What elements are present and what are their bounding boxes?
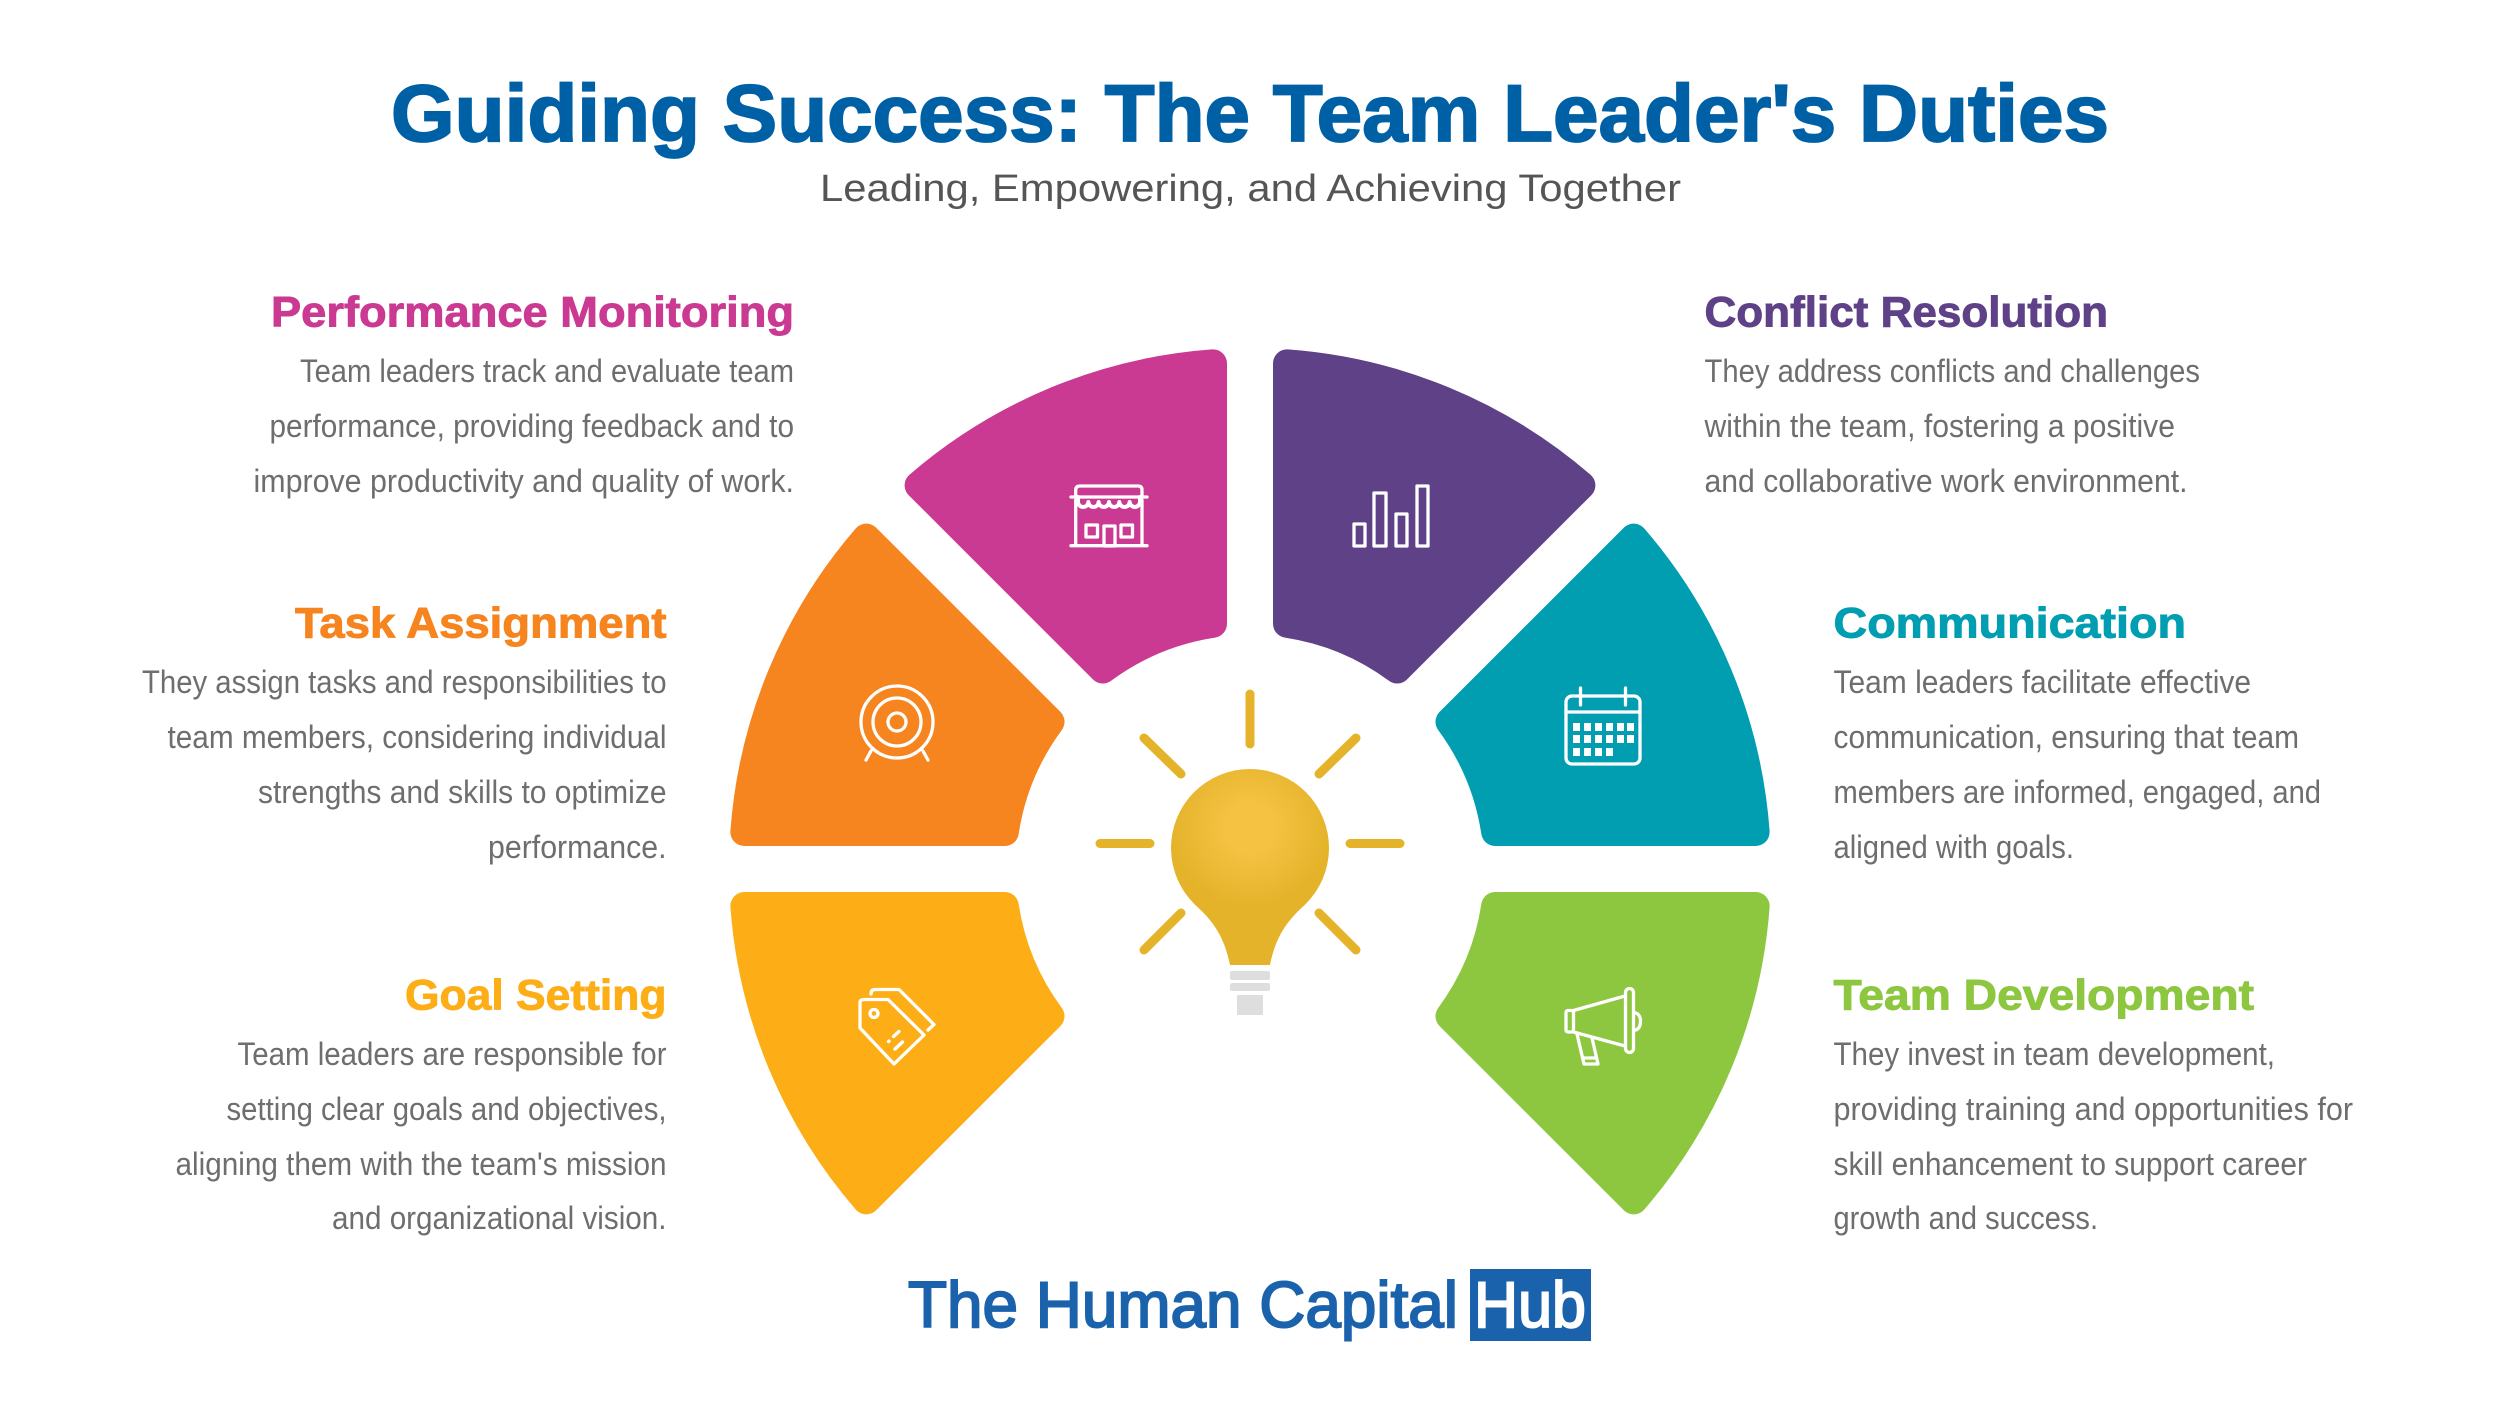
panel: team development (1834, 972, 2353, 1236)
description (1704, 353, 2200, 499)
description: strengths and skills to optimize (258, 774, 666, 810)
icon: bar chart (1354, 486, 1428, 546)
description: and collaborative work environment. (1704, 463, 2188, 499)
panel: conflict resolution (1704, 288, 2200, 499)
description: and organizational vision. (332, 1200, 666, 1236)
description: aligned with goals. (1834, 829, 2074, 865)
segment: team development (1450, 906, 1756, 1200)
panel: communication (1834, 600, 2321, 865)
description: They invest in team development, (1834, 1036, 2275, 1072)
heading: Task Assignment (295, 600, 666, 648)
icon: price tags (860, 990, 934, 1064)
icon: storefront (1071, 486, 1147, 546)
segment: task assignment (744, 538, 1050, 832)
bulb base (1230, 971, 1270, 1015)
heading: Conflict Resolution (1704, 288, 2108, 336)
description: They address conflicts and challenges (1704, 353, 2200, 389)
heading: Goal Setting (405, 972, 666, 1020)
description: setting clear goals and objectives, (226, 1091, 666, 1127)
description (176, 1036, 667, 1236)
description: team members, considering individual (168, 719, 666, 755)
heading: Team Development (1834, 972, 2254, 1020)
segment: communication (1450, 538, 1756, 832)
description: They assign tasks and responsibilities to (142, 664, 666, 700)
title: Guiding Success: The Team Leader's Duties (391, 69, 2109, 159)
description: performance, providing feedback and to (270, 408, 794, 444)
heading: Communication (1834, 600, 2186, 648)
icon: megaphone (1566, 988, 1640, 1064)
icon: target (861, 686, 933, 760)
bulb rays (1100, 694, 1400, 950)
description: performance. (488, 829, 666, 865)
description: communication, ensuring that team (1834, 719, 2299, 755)
description: skill enhancement to support career (1834, 1146, 2307, 1182)
segment: goal setting (744, 906, 1050, 1200)
description: Team leaders facilitate effective (1834, 664, 2251, 700)
bulb body (1171, 769, 1329, 965)
logo: The Human Capital Hub: The Human Capital (908, 1268, 1458, 1341)
subtitle: Leading, Empowering, and Achieving Together (820, 168, 1681, 210)
description (1834, 664, 2321, 865)
panel: goal setting (176, 972, 667, 1236)
segment: conflict resolution (1287, 363, 1581, 670)
panel: performance monitoring (254, 288, 794, 499)
description: providing training and opportunities for (1834, 1091, 2353, 1127)
description: Team leaders are responsible for (238, 1036, 667, 1072)
description: within the team, fostering a positive (1704, 408, 2175, 444)
icon: light bulb (1100, 694, 1400, 1015)
segment: performance monitoring (919, 363, 1213, 670)
description (254, 353, 794, 499)
heading: Performance Monitoring (271, 288, 794, 336)
description: Team leaders track and evaluate team (300, 353, 794, 389)
description: aligning them with the team's mission (176, 1146, 666, 1182)
description (142, 664, 666, 865)
panel: task assignment (142, 600, 666, 865)
logo: The Human Capital Hub: Hub (1474, 1268, 1586, 1341)
description: members are informed, engaged, and (1834, 774, 2321, 810)
description: improve productivity and quality of work. (254, 463, 794, 499)
description: growth and success. (1834, 1200, 2098, 1236)
icon: calendar (1566, 688, 1640, 764)
description (1834, 1036, 2353, 1236)
